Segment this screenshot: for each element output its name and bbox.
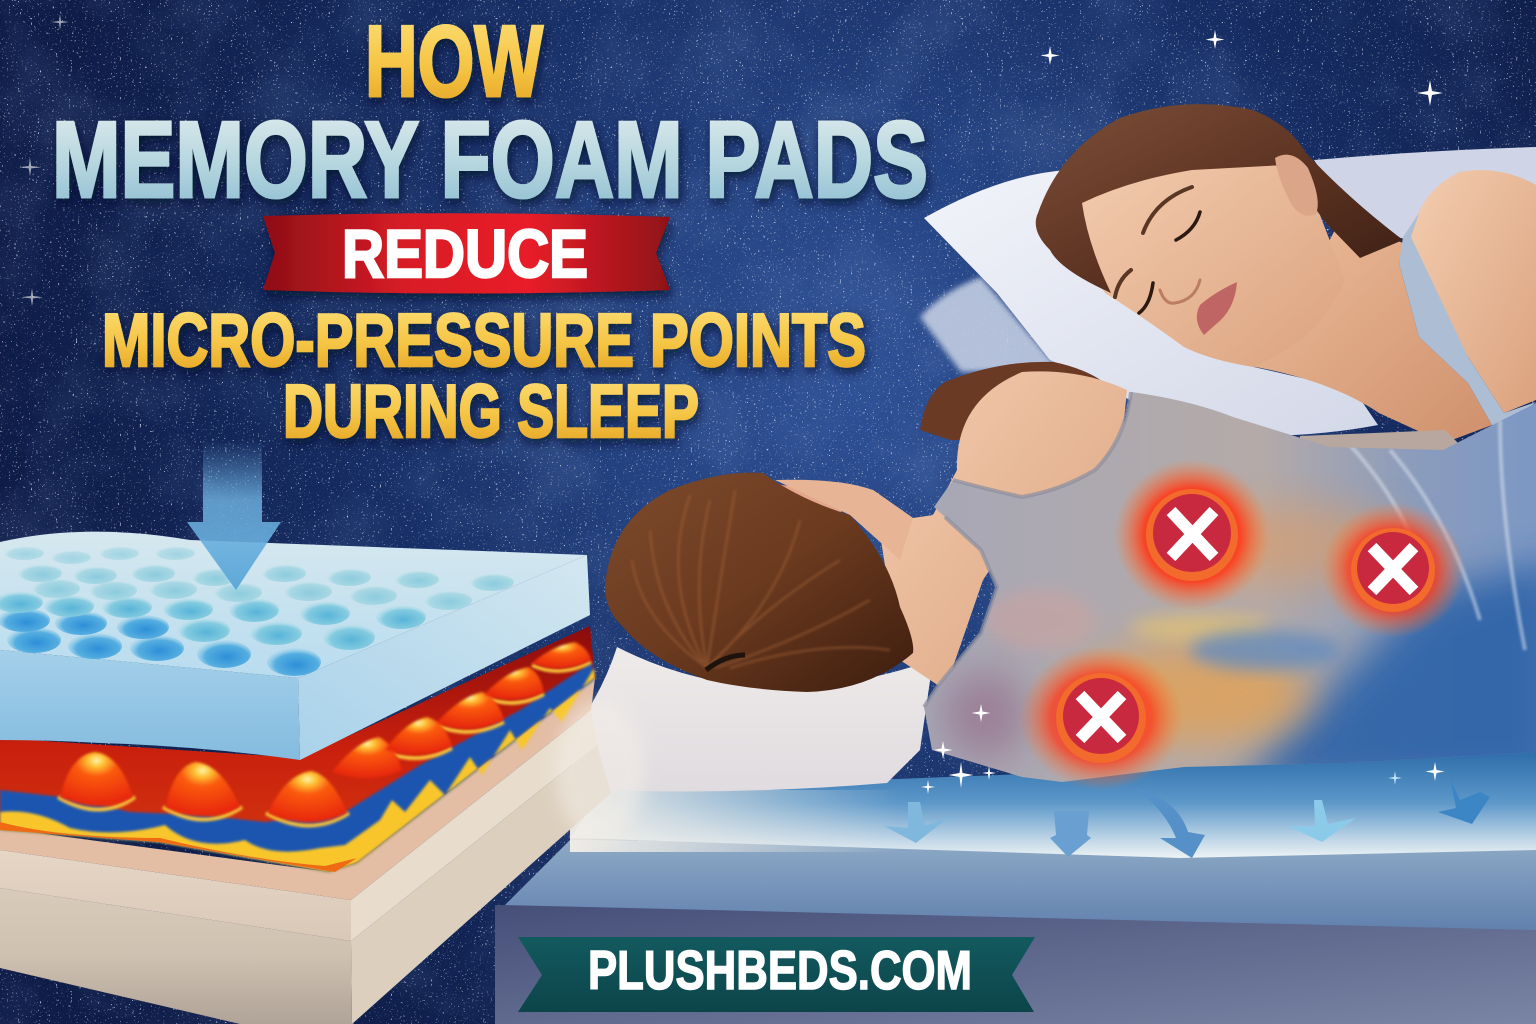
closed eye upper: [1115, 187, 1200, 313]
upper cream layer top: [0, 678, 595, 900]
pressure point marker: upper back: [1114, 459, 1270, 611]
hot dome 6: [436, 692, 504, 728]
main upper pillow: [924, 170, 1378, 436]
pad top: [0, 532, 587, 678]
eyebrows: [1115, 187, 1192, 297]
pad front: [0, 650, 300, 760]
neck and chest: [1250, 220, 1492, 443]
neck and shoulder: [873, 371, 1127, 690]
hot dome 2: [165, 762, 240, 816]
head skin: [775, 480, 913, 560]
heat smear upper: [1190, 505, 1410, 585]
arm: [1411, 170, 1536, 413]
shirt colour patches: [943, 420, 1536, 790]
neckline trim: [924, 392, 1131, 707]
blue smear: [1190, 630, 1340, 670]
mattress relief arrows: [884, 778, 1490, 858]
hot dome 8: [532, 642, 591, 668]
speckled blue band: [0, 662, 594, 872]
pad dimples back rows: [4, 546, 514, 610]
hair: [1036, 104, 1403, 293]
closed eye lower: [1139, 283, 1153, 313]
tank top: [924, 392, 1536, 782]
nose: [1160, 280, 1200, 303]
title line: MEMORY FOAM PADS: MEMORY FOAM PADS: [52, 99, 928, 221]
purple hip shadow: [943, 670, 1027, 760]
hot dome 1: [60, 752, 133, 806]
upper cream layer side: [351, 710, 597, 941]
website banner: PLUSHBEDS.COM: [588, 939, 972, 1001]
website banner: [518, 937, 1035, 1012]
yellow lower contour: [0, 668, 595, 872]
foam layers stack: [0, 532, 645, 1024]
hot dome 4: [332, 737, 402, 778]
face: [1078, 150, 1345, 367]
mattress top surface: [570, 748, 1536, 858]
sparkle stars: [19, 14, 1443, 306]
upper sleeper: [1036, 104, 1536, 443]
far arm: [1300, 430, 1470, 455]
mattress side: [505, 840, 1536, 930]
title line: HOW: HOW: [365, 6, 543, 118]
hair strands: [632, 490, 890, 668]
pressure point marker: mid back: [1321, 502, 1465, 638]
hot dome 7: [484, 667, 544, 699]
shirt fold highlights: [1350, 420, 1525, 650]
title line: DURING SLEEP: DURING SLEEP: [283, 369, 699, 453]
ribbon: REDUCE: [263, 213, 670, 294]
mattress: [495, 748, 1536, 1024]
title line: MICRO-PRESSURE POINTS: MICRO-PRESSURE POINTS: [102, 298, 866, 382]
upper right pillow: [1314, 147, 1536, 240]
pad dimples middle rows: [0, 591, 426, 650]
arrow 1: [884, 802, 949, 843]
sparkles on mattress: [921, 704, 1444, 794]
slab fade overlay: [555, 700, 645, 840]
heat base: [0, 626, 595, 872]
title: [52, 6, 928, 453]
heat map layer: [0, 626, 595, 872]
pad right side: [298, 555, 590, 760]
ear: [767, 483, 851, 515]
arrow 3: [1135, 788, 1205, 858]
second pillow behind: [920, 277, 1060, 372]
ear: [1275, 155, 1318, 216]
pressure point marker: hip: [1019, 646, 1183, 790]
orange lower contour: [0, 822, 357, 872]
hair tie: [706, 655, 745, 670]
ribbon: REDUCE: REDUCE: [342, 216, 588, 292]
lower sleeper: [605, 362, 1536, 790]
lower pillow: [560, 647, 933, 791]
dome rims: [58, 662, 591, 826]
arrow 5: [1438, 778, 1490, 824]
hot dome 3: [268, 771, 347, 822]
arm behind: [920, 362, 1107, 440]
arrow 4: [1288, 800, 1356, 842]
lips: [1197, 282, 1237, 335]
blue foam pad: [0, 532, 590, 760]
downward pressure arrow: [187, 440, 281, 590]
pad dimples front rows: [0, 608, 321, 676]
heat smear yellow: [1130, 614, 1270, 642]
hot dome 5: [385, 717, 452, 754]
lower cream layer front: [0, 888, 352, 1024]
lower cream layer side: [351, 745, 611, 1024]
tank top: [1399, 213, 1536, 428]
hair: [605, 473, 913, 692]
upper cream layer front: [0, 850, 351, 941]
mattress pale left fade: [570, 790, 900, 852]
blue lower shirt: [1230, 560, 1536, 790]
heat smear orange: [1070, 645, 1310, 745]
arrow 2: [1050, 811, 1091, 857]
pale smear left: [985, 590, 1095, 650]
hot domes: [60, 642, 591, 822]
mattress base: [495, 905, 1536, 1024]
